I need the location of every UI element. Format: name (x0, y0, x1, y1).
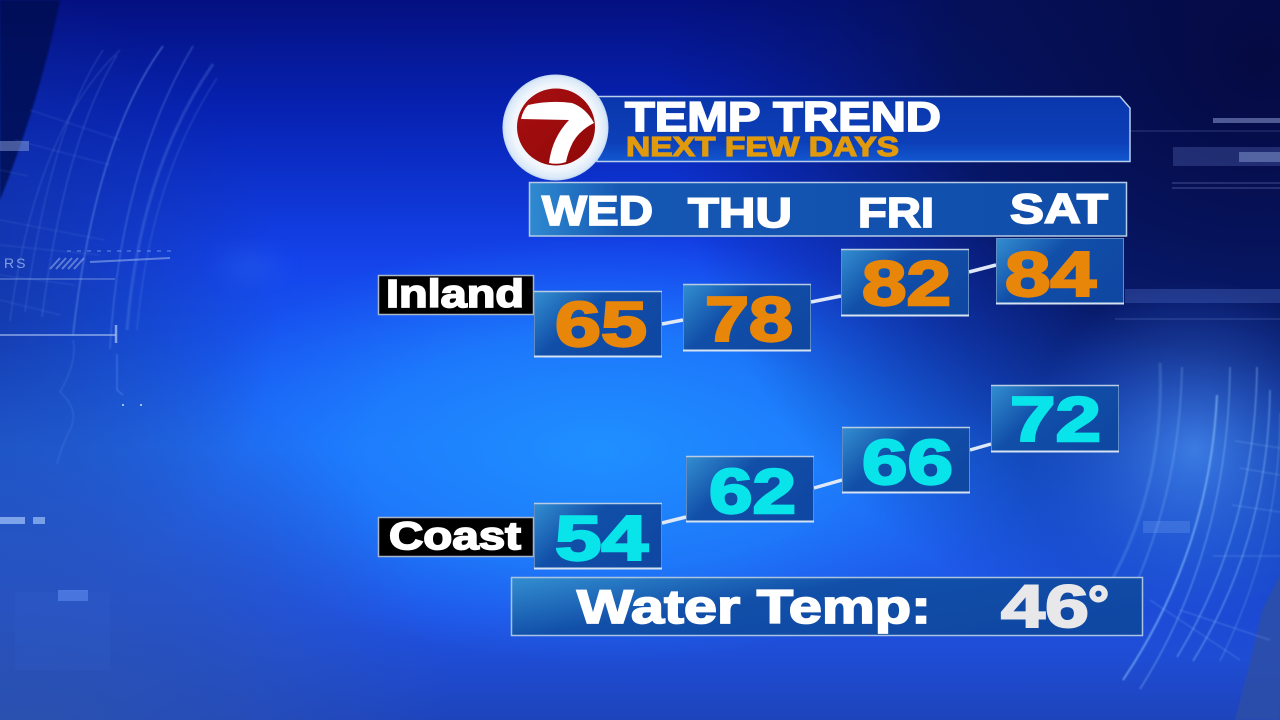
label: coast (378, 515, 534, 558)
label: inland: Inland (386, 273, 524, 316)
connector lines: inland trend (662, 265, 996, 324)
inland sat: 84 (996, 238, 1124, 310)
inland thu: 78: 78 (705, 285, 793, 355)
day: thu: THU (688, 189, 792, 236)
value: 46 degrees: ° (1088, 576, 1109, 632)
coast fri: 66 (842, 428, 970, 498)
inland fri: 82: 82 (862, 249, 951, 319)
coast thu: 62: 62 (709, 457, 796, 527)
inland sat: 84: 84 (1005, 240, 1096, 310)
day: sat: SAT (1010, 185, 1108, 232)
water temperature bar (512, 573, 1142, 640)
background: RS (4, 255, 27, 271)
coast wed: 54 (534, 504, 662, 574)
coast fri: 66: 66 (862, 428, 953, 498)
value: 46 degrees: 46 (1001, 573, 1089, 640)
coast sat: 72: 72 (1010, 385, 1101, 455)
label: water temp: Water Temp: (577, 580, 931, 633)
value: 46 degrees (1001, 573, 1109, 640)
subtitle: next few days: NEXT FEW DAYS (626, 131, 899, 162)
day header bar (530, 182, 1126, 236)
title: temp trend: TEMP TREND (625, 93, 941, 140)
inland fri: 82 (841, 249, 969, 319)
day: fri: FRI (858, 189, 934, 236)
coast sat: 72 (991, 385, 1119, 455)
label: coast: Coast (389, 515, 521, 558)
inland thu: 78 (683, 284, 811, 355)
inland wed: 65: 65 (555, 290, 647, 360)
coast thu: 62 (686, 456, 814, 527)
day: wed: WED (542, 187, 653, 234)
inland wed: 65 (534, 290, 662, 360)
connector lines: coast trend (662, 444, 991, 523)
coast wed: 54: 54 (555, 504, 648, 574)
icon: channel 7 logo (502, 74, 608, 180)
title banner (597, 93, 1130, 162)
